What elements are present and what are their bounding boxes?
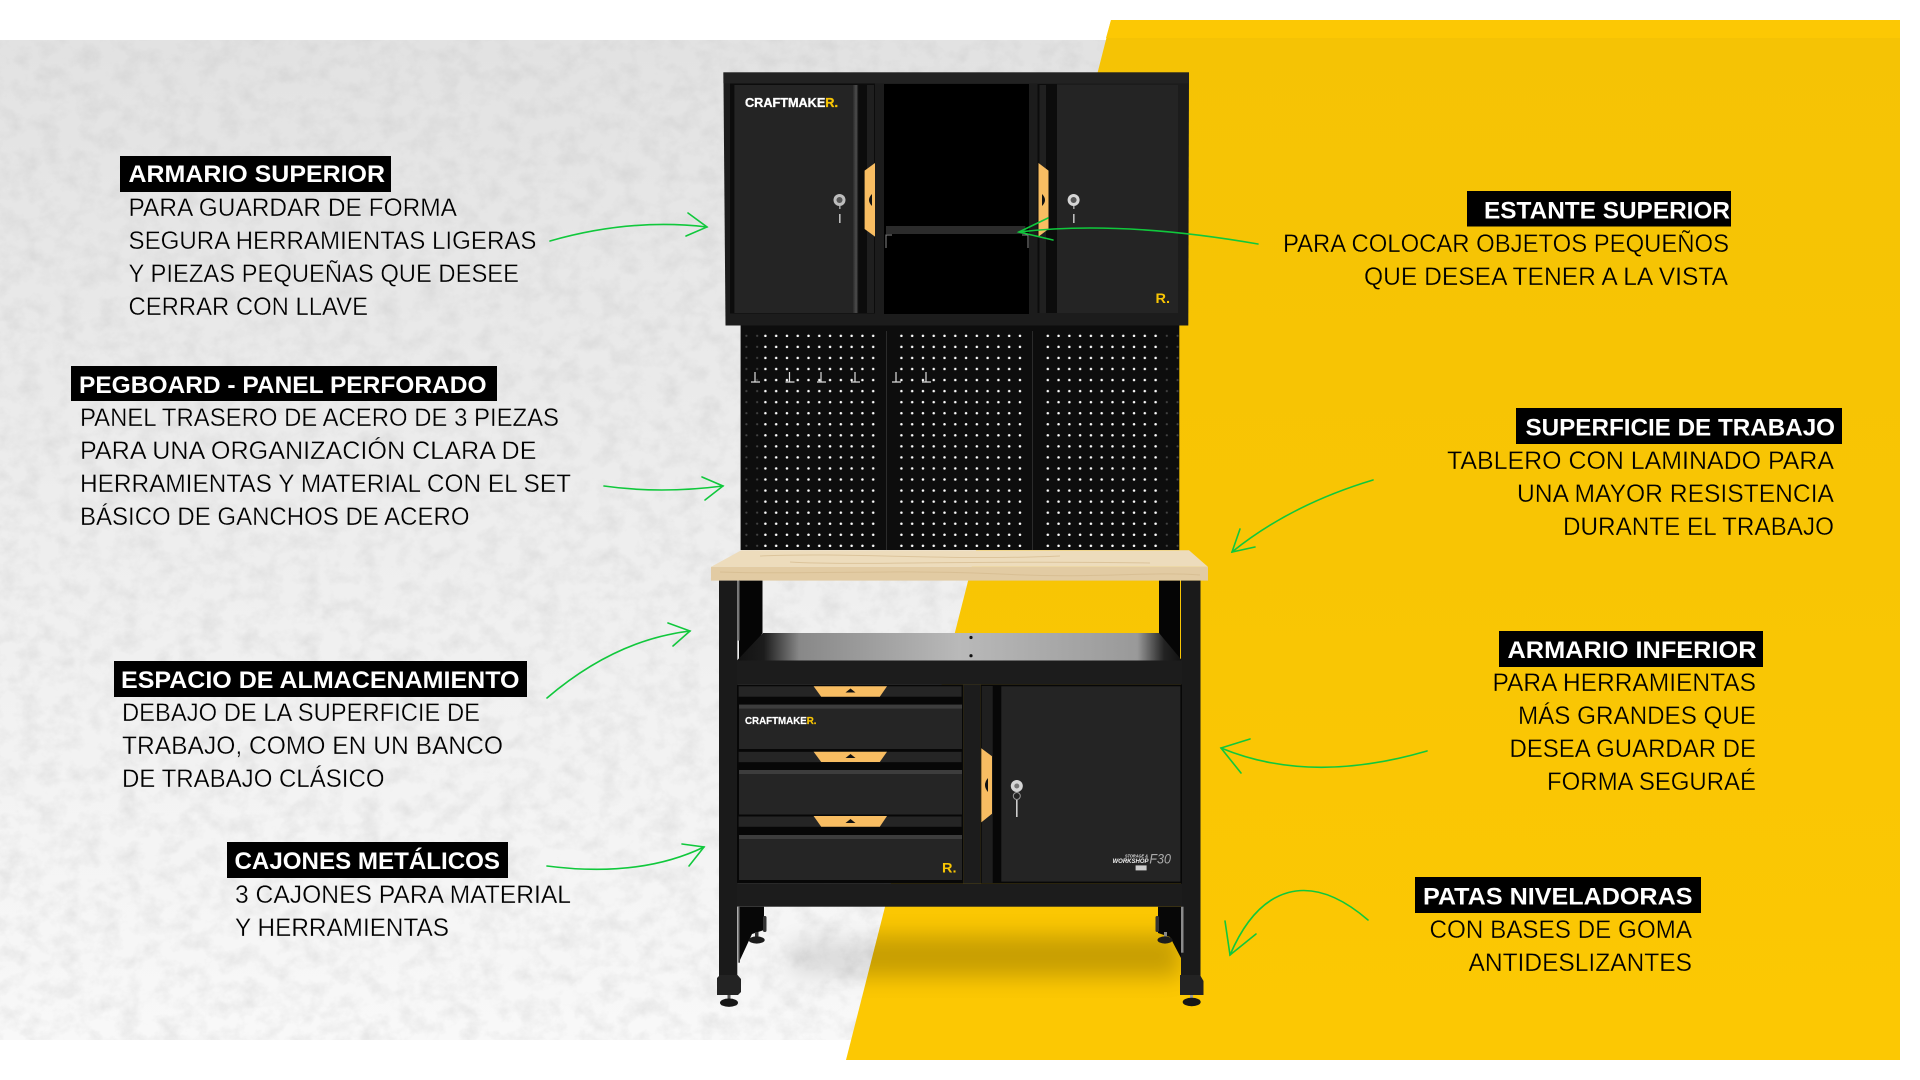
left rear brace (737, 907, 766, 963)
callout: armario superior: SEGURA HERRAMIENTAS LIGERAS (128, 227, 536, 255)
callout: patas niveladoras (1415, 877, 1701, 977)
callout: armario inferior: MÁS GRANDES QUE (1518, 701, 1756, 730)
callout: armario superior: ARMARIO SUPERIOR (128, 161, 385, 188)
callout: cajones metalicos: CAJONES METÁLICOS (234, 847, 500, 875)
callout: superficie de trabajo (1447, 408, 1842, 541)
open shelf compartment (884, 84, 1029, 314)
drawer 3: R. (942, 859, 956, 875)
drawer 1 (739, 686, 962, 749)
callout: pegboard: PARA UNA ORGANIZACIÓN CLARA DE (80, 436, 536, 465)
callout: armario superior: Y PIEZAS PEQUEÑAS QUE DESEE (128, 259, 519, 288)
callout: cajones metalicos: 3 CAJONES PARA MATERIAL (235, 881, 571, 909)
callout: estante superior: PARA COLOCAR OBJETOS PEQUEÑOS (1283, 229, 1729, 258)
callout: espacio de almacenamiento: DEBAJO DE LA SUPERFICIE DE (122, 699, 480, 727)
frame and legs (719, 581, 1200, 977)
leveling feet (717, 907, 1204, 1007)
arrow: espacio de almacenamiento (547, 623, 690, 698)
left door (734, 85, 853, 313)
callout: estante superior: ESTANTE SUPERIOR (1484, 198, 1730, 224)
callout: armario inferior: DESEA GUARDAR DE (1510, 735, 1756, 763)
arrow: patas niveladoras (1225, 891, 1368, 955)
drawer 3 (739, 816, 962, 880)
right rear brace (1156, 907, 1184, 958)
callout: estante superior: QUE DESEA TENER A LA VISTA (1364, 263, 1728, 291)
drawers (739, 686, 962, 880)
callout: superficie de trabajo: TABLERO CON LAMINADO PARA (1447, 447, 1834, 475)
callout: estante superior (1283, 191, 1731, 291)
callout: superficie de trabajo: SUPERFICIE DE TRABAJO (1526, 414, 1835, 442)
callout: patas niveladoras: PATAS NIVELADORAS (1423, 884, 1692, 910)
upper cabinet (723, 72, 1189, 326)
callout: patas niveladoras: ANTIDESLIZANTES (1468, 949, 1692, 977)
callout: espacio de almacenamiento: DE TRABAJO CLÁSICO (122, 764, 384, 793)
arrow: cajones metalicos (547, 844, 704, 869)
drawer 1: CRAFTMAKER. (745, 716, 817, 727)
callout: armario inferior: PARA HERRAMIENTAS (1492, 669, 1756, 697)
arrow: armario inferior (1221, 739, 1427, 773)
arrow: superficie de trabajo (1232, 480, 1373, 552)
callout: pegboard: PEGBOARD - PANEL PERFORADO (79, 372, 486, 399)
callout: armario superior: CERRAR CON LLAVE (128, 293, 368, 321)
arrow: pegboard (604, 477, 723, 500)
logo: R: R. (1156, 290, 1170, 306)
model badge (1112, 851, 1171, 870)
arrow: armario superior (550, 213, 707, 241)
callout: espacio de almacenamiento: TRABAJO, COMO EN UN BANCO (122, 732, 503, 760)
floor shadow (790, 935, 1180, 977)
drawer 2 (739, 752, 962, 814)
logo: craftmaker: CRAFTMAKER. (745, 96, 838, 110)
callout: pegboard: PANEL TRASERO DE ACERO DE 3 PIEZAS (80, 404, 559, 432)
right door (1057, 85, 1178, 313)
yellow handles (865, 163, 875, 237)
model badge: F30 (1149, 851, 1171, 867)
callout: armario inferior (1492, 631, 1763, 796)
callout: armario superior (120, 156, 536, 321)
workbench (711, 72, 1208, 1007)
arrow: estante superior (1019, 218, 1258, 244)
callout: armario inferior: FORMA SEGURAÉ (1547, 767, 1756, 796)
callout: patas niveladoras: CON BASES DE GOMA (1430, 916, 1692, 944)
callout: espacio de almacenamiento: ESPACIO DE ALMACENAMIENTO (121, 667, 520, 694)
locks (834, 194, 846, 206)
callout: armario inferior: ARMARIO INFERIOR (1508, 637, 1756, 664)
callout: cajones metalicos (227, 842, 571, 942)
panel: yellow background (846, 20, 1900, 1060)
pegboard panel (741, 325, 1179, 551)
lower cabinet door (981, 686, 1180, 883)
callout: superficie de trabajo: DURANTE EL TRABAJO (1563, 513, 1834, 541)
callout: pegboard: BÁSICO DE GANCHOS DE ACERO (80, 502, 470, 531)
model badge: WORKSHOP (1112, 859, 1149, 865)
panel: gray concrete background (0, 40, 1120, 1040)
callout: pegboard (71, 366, 571, 531)
callout: armario superior: PARA GUARDAR DE FORMA (128, 194, 457, 222)
model badge: STORAGE & (1125, 854, 1148, 858)
callout: superficie de trabajo: UNA MAYOR RESISTENCIA (1517, 480, 1834, 508)
callout: espacio de almacenamiento (114, 661, 527, 793)
callout: cajones metalicos: Y HERRAMIENTAS (235, 914, 449, 942)
wooden worktop (711, 550, 1208, 581)
callout: pegboard: HERRAMIENTAS Y MATERIAL CON EL SET (80, 470, 571, 498)
